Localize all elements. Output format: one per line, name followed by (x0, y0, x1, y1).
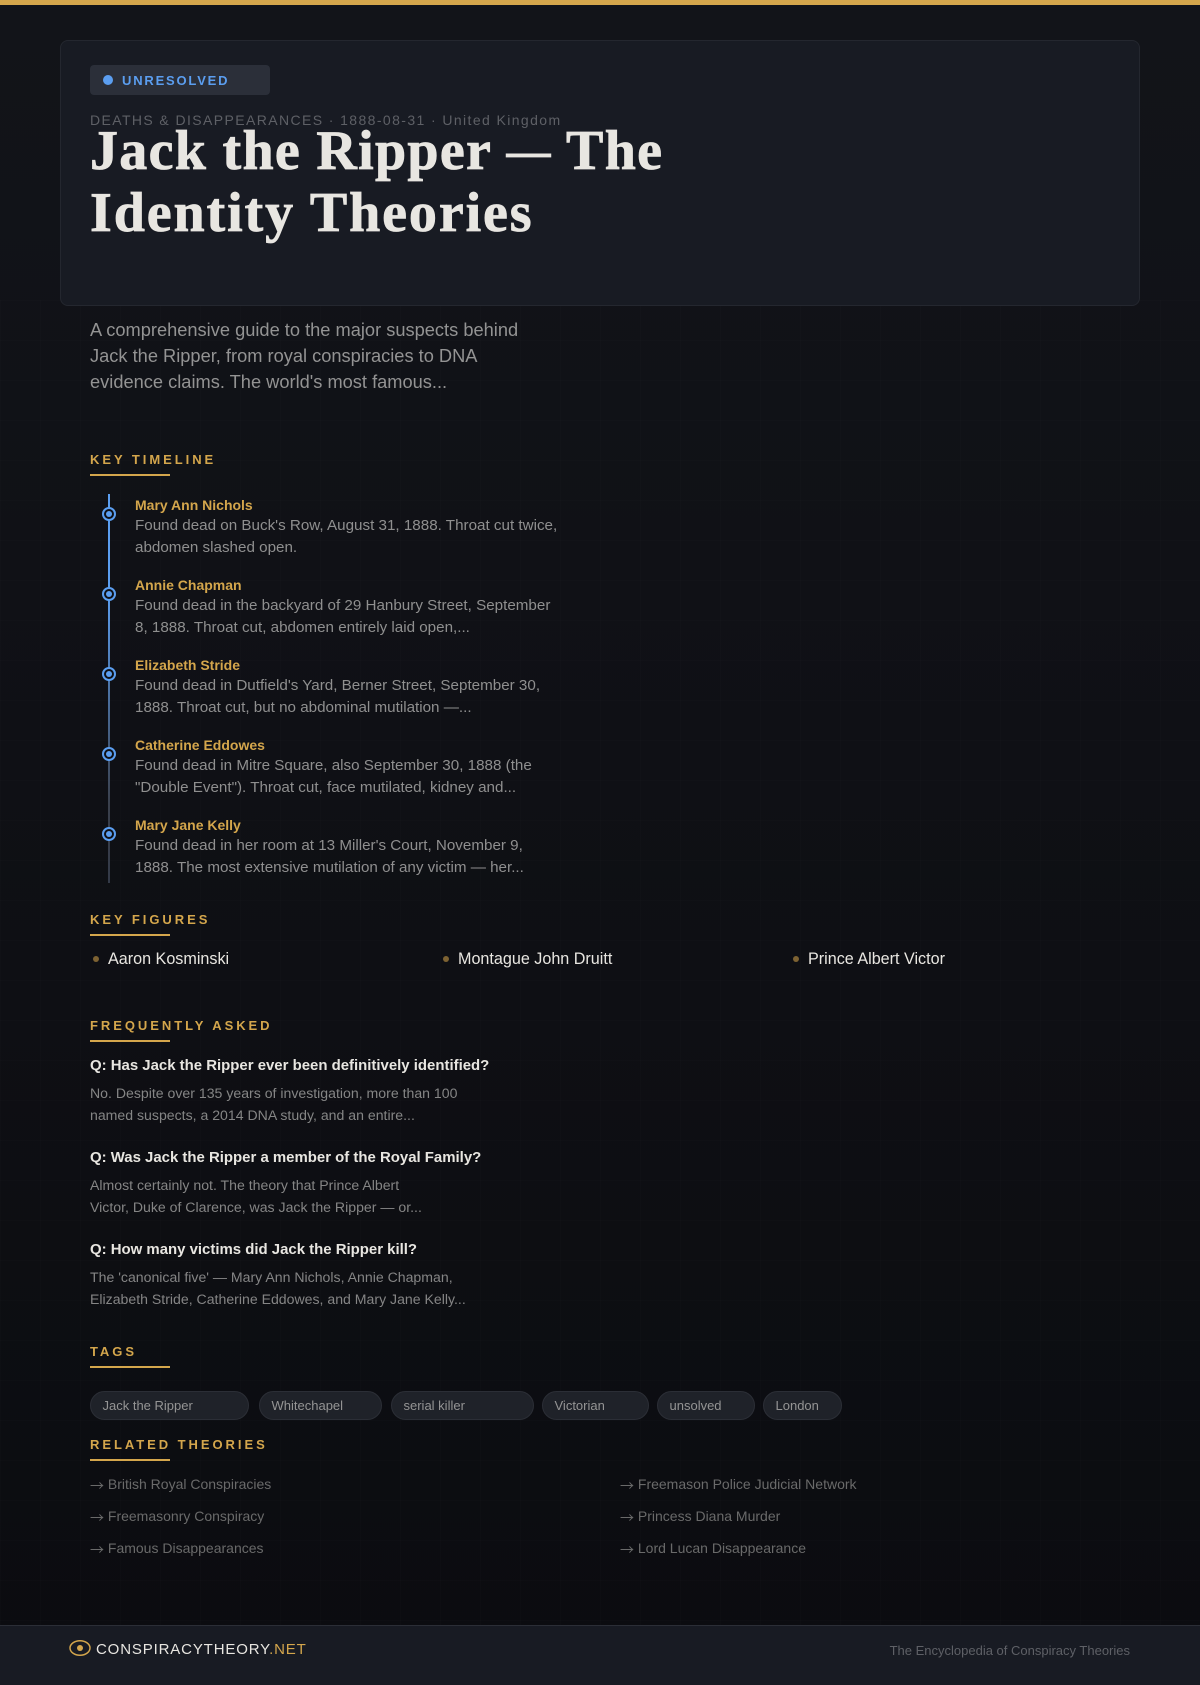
timeline line (108, 494, 110, 883)
related link: → Princess Diana Murder (620, 1508, 780, 1528)
tag (259, 1391, 382, 1420)
title: Identity Theories (90, 182, 534, 244)
event: Annie Chapman: Found dead in the backyard of 29 Hanbury Street, September (135, 597, 550, 614)
related link: → Famous Disappearances (90, 1540, 264, 1560)
metadata line: DEATHS & DISAPPEARANCES · 1888-08-31 · United Kingdom (90, 112, 562, 128)
faq answer 1: No. Despite over 135 years of investigation, more than 100 (90, 1085, 457, 1101)
related link: → Freemason Police Judicial Network (620, 1476, 857, 1496)
figure: Aaron Kosminski: Aaron Kosminski (108, 950, 229, 968)
tag: Victorian (554, 1398, 605, 1413)
tag (657, 1391, 755, 1420)
footer (0, 1625, 1200, 1685)
faq answer 3: The 'canonical five' — Mary Ann Nichols, Annie Chapman, (90, 1269, 453, 1285)
tag (391, 1391, 534, 1420)
tag: unsolved (670, 1398, 722, 1413)
footer tagline: The Encyclopedia of Conspiracy Theories (890, 1643, 1130, 1658)
related link: → Lord Lucan Disappearance (620, 1540, 806, 1560)
badge label: UNRESOLVED (122, 73, 229, 88)
timeline (108, 494, 110, 883)
section heading: tags: TAGS (90, 1344, 137, 1359)
brand name: CONSPIRACYTHEORY.NET (96, 1641, 307, 1658)
summary text: evidence claims. The world's most famous... (90, 371, 447, 392)
event: Catherine Eddowes: Catherine Eddowes (135, 737, 265, 753)
related link: → British Royal Conspiracies (90, 1476, 271, 1496)
related link: → Freemasonry Conspiracy (90, 1508, 264, 1528)
faq question 2: Q: Was Jack the Ripper a member of the Royal Family? (90, 1149, 481, 1166)
event: Mary Ann Nichols: abdomen slashed open. (135, 539, 297, 556)
summary text: A comprehensive guide to the major suspects behind (90, 319, 518, 340)
status badge (90, 65, 270, 95)
timeline node 3 (102, 667, 116, 681)
faq question 1: Q: Has Jack the Ripper ever been definitively identified? (90, 1057, 489, 1074)
figure: Prince Albert Victor: Prince Albert Victor (808, 950, 945, 968)
tag (542, 1391, 649, 1420)
icon: eye logo (69, 1640, 91, 1656)
figure: Montague John Druitt: Montague John Druitt (458, 950, 612, 968)
tag: London (776, 1398, 819, 1413)
tag (763, 1391, 842, 1420)
section heading: frequently asked: FREQUENTLY ASKED (90, 1018, 273, 1033)
event: Elizabeth Stride: Elizabeth Stride (135, 657, 240, 673)
faq question 3: Q: How many victims did Jack the Ripper kill? (90, 1241, 417, 1258)
timeline node 4 (102, 747, 116, 761)
summary text (90, 319, 518, 392)
event: Mary Ann Nichols (135, 497, 557, 556)
event: Mary Ann Nichols: Mary Ann Nichols (135, 497, 253, 513)
faq answer 2: Victor, Duke of Clarence, was Jack the Ripper — or... (90, 1199, 422, 1215)
event: Catherine Eddowes: "Double Event"). Throat cut, face mutilated, kidney and... (135, 779, 516, 796)
badge dot (103, 75, 113, 85)
faq answer 2 (90, 1177, 422, 1215)
faq answer 1: named suspects, a 2014 DNA study, and an entire... (90, 1107, 415, 1123)
summary text: Jack the Ripper, from royal conspiracies to DNA (90, 345, 477, 366)
tag (90, 1391, 249, 1420)
timeline node 5 (102, 827, 116, 841)
section heading: key figures: KEY FIGURES (90, 912, 210, 927)
event: Annie Chapman (135, 577, 550, 636)
tag: Whitechapel (272, 1398, 343, 1413)
event: Mary Ann Nichols: Found dead on Buck's Row, August 31, 1888. Throat cut twice, (135, 517, 557, 534)
faq answer 3 (90, 1269, 466, 1307)
top accent bar (0, 0, 1200, 5)
event: Mary Jane Kelly: 1888. The most extensive mutilation of any victim — her... (135, 859, 524, 876)
timeline node 2 (102, 587, 116, 601)
event: Annie Chapman: Annie Chapman (135, 577, 242, 593)
timeline node 1 (102, 507, 116, 521)
faq answer 2: Almost certainly not. The theory that Prince Albert (90, 1177, 399, 1193)
faq answer 3: Elizabeth Stride, Catherine Eddowes, and Mary Jane Kelly... (90, 1291, 466, 1307)
title (90, 120, 663, 244)
tag: Jack the Ripper (102, 1398, 193, 1413)
event: Mary Jane Kelly: Found dead in her room at 13 Miller's Court, November 9, (135, 837, 523, 854)
event: Elizabeth Stride (135, 657, 540, 716)
title: Jack the Ripper — The (90, 120, 663, 182)
event: Mary Jane Kelly: Mary Jane Kelly (135, 817, 241, 833)
event: Elizabeth Stride: Found dead in Dutfield's Yard, Berner Street, September 30, (135, 677, 540, 694)
event: Mary Jane Kelly (135, 817, 524, 876)
event: Annie Chapman: 8, 1888. Throat cut, abdomen entirely laid open,... (135, 619, 470, 636)
event: Elizabeth Stride: 1888. Throat cut, but no abdominal mutilation —... (135, 699, 472, 716)
event: Catherine Eddowes (135, 737, 532, 796)
faq answer 1 (90, 1085, 457, 1123)
tag: serial killer (404, 1398, 465, 1413)
section heading: key timeline: KEY TIMELINE (90, 452, 216, 467)
event: Catherine Eddowes: Found dead in Mitre Square, also September 30, 1888 (the (135, 757, 532, 774)
section heading: related theories: RELATED THEORIES (90, 1437, 268, 1452)
panel: hero header (60, 40, 1140, 306)
